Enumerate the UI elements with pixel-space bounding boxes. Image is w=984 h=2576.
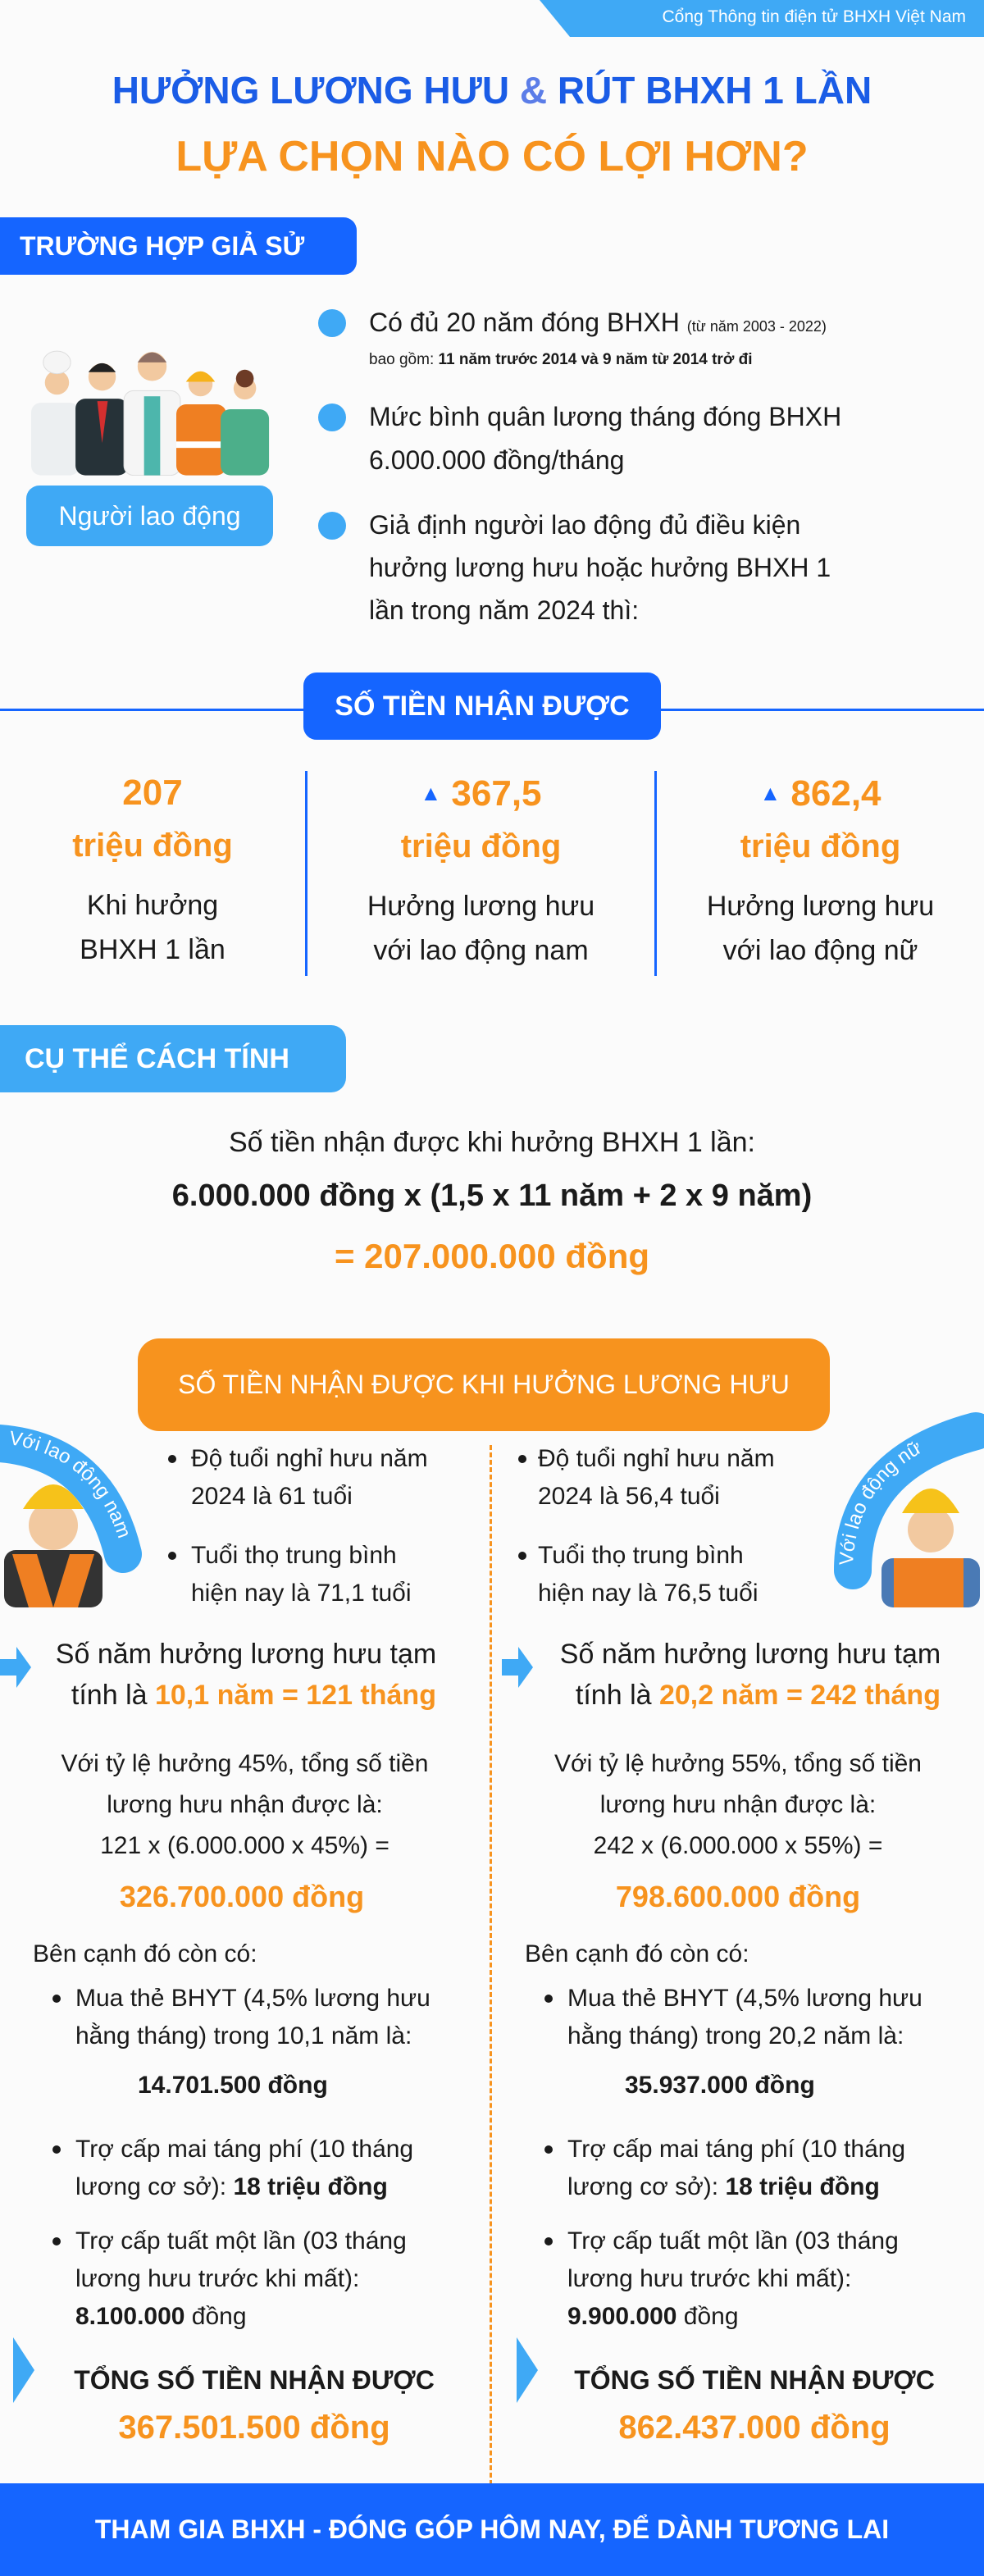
right column: female: lương hưu nhận được là: [600,1791,876,1818]
assumption bullets: Mức bình quân lương tháng đóng BHXH [369,402,841,431]
assumption bullets: Giả định người lao động đủ điều kiện [369,510,800,540]
left column: male: hiện nay là 71,1 tuổi [191,1580,412,1607]
right column: female: tính là 20,2 năm = 242 tháng [576,1680,941,1711]
left column: male: Bên cạnh đó còn có: [33,1940,257,1967]
left column: male: lương cơ sở): 18 triệu đồng [75,2173,388,2200]
right column: female: Trợ cấp tuất một lần (03 tháng [567,2227,899,2255]
right column: female: Độ tuổi nghỉ hưu năm [538,1445,775,1472]
stat: 862,4 [707,773,934,966]
right column: female: Trợ cấp mai táng phí (10 tháng [567,2136,905,2163]
right column: female: 35.937.000 đồng [625,2072,815,2099]
left column: male: Độ tuổi nghỉ hưu năm [191,1445,428,1472]
right column: female: hằng tháng) trong 20,2 năm là: [567,2022,904,2049]
button: nguoi lao dong [26,486,273,546]
calculation one-time: = 207.000.000 đồng [335,1237,649,1275]
stat: 367,5: với lao động nam [373,935,589,966]
left column: male: Số năm hưởng lương hưu tạm [56,1639,436,1670]
top banner [540,0,984,37]
arrow [0,1647,31,1688]
stat: 862,4: với lao động nữ [723,935,918,966]
icon: workers [31,351,269,476]
left column: male: Tuổi thọ trung bình [191,1542,397,1569]
badge: male worker: Với lao động nam [11,1430,128,1539]
assumption bullets: Có đủ 20 năm đóng BHXH (từ năm 2003 - 2022) [369,308,827,337]
tab: cu the cach tinh: CỤ THỂ CÁCH TÍNH [25,1043,289,1074]
stat: 207 [72,773,233,965]
left column: male: lương hưu trước khi mất): [75,2265,359,2292]
badge: male worker [0,1425,142,1607]
stat: 862,4: ▲ 862,4 [759,773,882,814]
right column: female: hiện nay là 76,5 tuổi [538,1580,758,1607]
stat: 367,5: triệu đồng [401,828,561,864]
tab: truong hop gia su: TRƯỜNG HỢP GIẢ SỬ [20,231,304,261]
left column: male: 367.501.500 đồng [118,2410,390,2446]
stat: 862,4: triệu đồng [740,828,900,864]
pill: so tien nhan duoc: SỐ TIỀN NHẬN ĐƯỢC [335,691,630,722]
left column: male: 326.700.000 đồng [120,1880,364,1913]
tab: truong hop gia su [0,217,357,275]
left column: male: lương hưu nhận được là: [107,1791,383,1818]
assumption bullets: bao gồm: 11 năm trước 2014 và 9 năm từ 2014 trở đi [369,351,753,368]
left column: male: Với tỷ lệ hưởng 45%, tổng số tiền [61,1750,428,1777]
button: nguoi lao dong: Người lao động [58,501,241,531]
footer: THAM GIA BHXH - ĐÓNG GÓP HÔM NAY, ĐỂ DÀNH TƯƠNG LAI [95,2514,889,2544]
left column: male: tính là 10,1 năm = 121 tháng [71,1680,436,1711]
right column: female: Với tỷ lệ hưởng 55%, tổng số tiền [554,1750,922,1777]
stats row [72,771,934,976]
stat: 367,5: ▲ 367,5 [420,773,542,814]
right column: female: Bên cạnh đó còn có: [525,1940,749,1967]
left column: male [0,1445,436,2446]
calculation one-time [172,1127,812,1275]
badge: female worker [834,1412,984,1607]
right column: female: Số năm hưởng lương hưu tạm [560,1639,941,1670]
assumption bullets: lần trong năm 2024 thì: [369,595,639,625]
right column: female: 9.900.000 đồng [567,2303,739,2330]
left column: male: Mua thẻ BHYT (4,5% lương hưu [75,1985,430,2012]
left column: male: Trợ cấp tuất một lần (03 tháng [75,2227,407,2255]
stat: 862,4: Hưởng lương hưu [707,891,934,922]
pill: pension [138,1338,830,1431]
pill: pension: SỐ TIỀN NHẬN ĐƯỢC KHI HƯỞNG LƯƠNG HƯU [178,1370,790,1399]
assumption bullets [318,308,841,625]
right column: female: 2024 là 56,4 tuổi [538,1483,720,1510]
stat: 207: triệu đồng [72,828,233,864]
left column: male: hằng tháng) trong 10,1 năm là: [75,2022,412,2049]
calculation one-time: Số tiền nhận được khi hưởng BHXH 1 lần: [229,1127,755,1158]
right column: female: 798.600.000 đồng [616,1880,860,1913]
stat: 367,5 [367,773,594,966]
calculation one-time: 6.000.000 đồng x (1,5 x 11 năm + 2 x 9 năm) [172,1179,812,1213]
right column: female: 242 x (6.000.000 x 55%) = [594,1832,882,1859]
stat: 207: BHXH 1 lần [80,934,226,965]
left column: male: Trợ cấp mai táng phí (10 tháng [75,2136,413,2163]
left column: male: 121 x (6.000.000 x 45%) = [100,1832,390,1859]
divider line [0,709,984,711]
stat: 367,5: Hưởng lương hưu [367,891,594,922]
assumption bullets: 6.000.000 đồng/tháng [369,445,624,475]
left column: male: 8.100.000 đồng [75,2303,247,2330]
badge: female worker: Với lao động nữ [839,1442,920,1565]
stat: 207: Khi hưởng [87,890,218,921]
subtitle: LỰA CHỌN NÀO CÓ LỢI HƠN? [175,133,809,180]
right column: female: 862.437.000 đồng [618,2410,891,2446]
dashed divider [490,1445,492,2485]
right column: female [502,1445,941,2446]
stat: 207: 207 [122,773,183,813]
right column: female: TỔNG SỐ TIỀN NHẬN ĐƯỢC [574,2365,935,2395]
top banner: Cổng Thông tin điện tử BHXH Việt Nam [663,7,966,26]
right column: female: lương cơ sở): 18 triệu đồng [567,2173,880,2200]
footer [0,2483,984,2576]
tab: cu the cach tinh [0,1025,346,1092]
left column: male: TỔNG SỐ TIỀN NHẬN ĐƯỢC [74,2365,435,2395]
assumption bullets: hưởng lương hưu hoặc hưởng BHXH 1 [369,553,831,582]
right column: female: lương hưu trước khi mất): [567,2265,851,2292]
left column: male: 2024 là 61 tuổi [191,1483,353,1510]
right column: female: Mua thẻ BHYT (4,5% lương hưu [567,1985,922,2012]
left column: male: 14.701.500 đồng [138,2072,328,2099]
right column: female: Tuổi thọ trung bình [538,1542,744,1569]
title: HƯỞNG LƯƠNG HƯU & RÚT BHXH 1 LẦN [112,69,872,112]
pill: so tien nhan duoc [303,672,661,740]
